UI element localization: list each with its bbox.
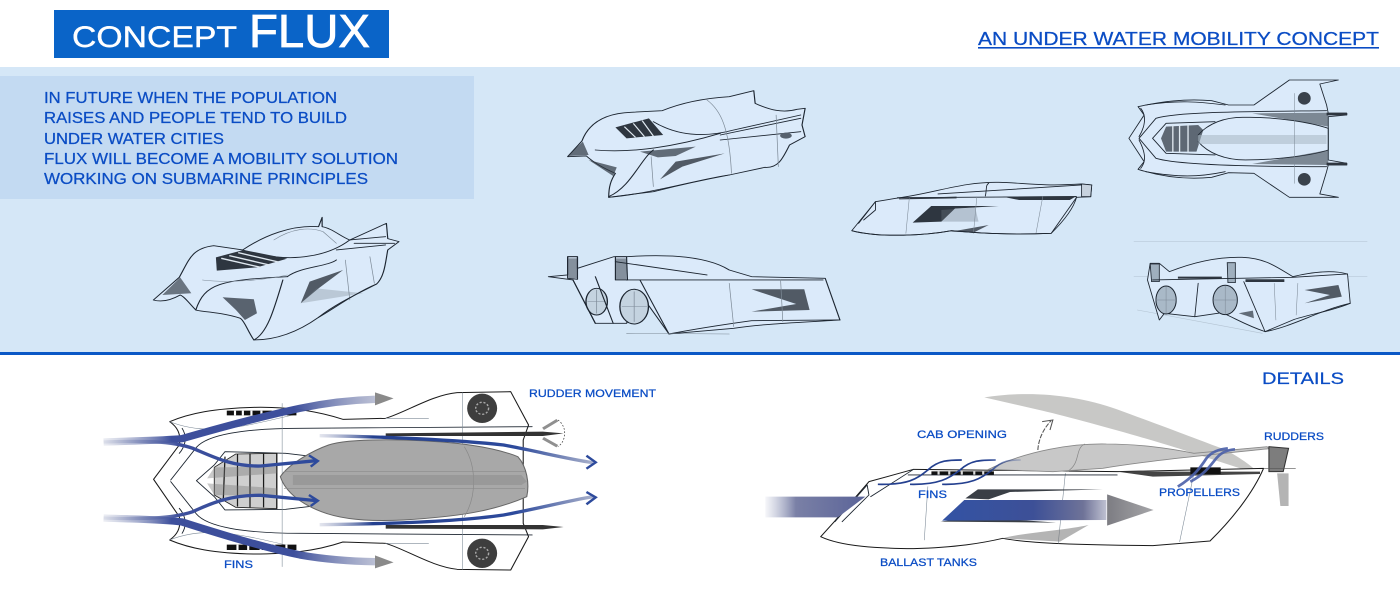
sketch: top view, upper right — [1129, 80, 1347, 197]
body detail lines — [924, 473, 1194, 543]
panel: intro text: UNDER WATER CITIES — [44, 131, 224, 148]
rudder — [1269, 447, 1289, 472]
cab opening arrow — [1038, 421, 1051, 450]
closed canopy — [989, 444, 1269, 472]
sketch: side view, centre right — [852, 182, 1092, 235]
diagram: side view with labels — [765, 394, 1296, 549]
label: cab opening: CAB OPENING — [917, 429, 1007, 441]
propellers — [467, 394, 497, 423]
flow bands — [765, 497, 865, 517]
panel: intro text: WORKING ON SUBMARINE PRINCIPLES — [44, 171, 368, 188]
fins — [227, 411, 296, 550]
label: ballast tanks: BALLAST TANKS — [880, 557, 977, 569]
sketch: rear view with propellers, lower middle — [548, 256, 840, 334]
panel: intro text: IN FUTURE WHEN THE POPULATION — [44, 90, 337, 107]
flow arrowheads — [375, 392, 394, 568]
label: fins top view: FINS — [224, 559, 253, 571]
panel: intro text — [0, 76, 474, 199]
vehicle body — [821, 468, 1264, 549]
vehicle outline — [154, 392, 529, 570]
propeller block — [1190, 467, 1221, 474]
title banner — [54, 5, 389, 58]
label: fins side view: FINS — [918, 489, 947, 501]
fins strip — [931, 471, 994, 475]
sketch: three-quarter view, upper middle — [568, 91, 805, 197]
diagram: top view with flow arrows — [104, 392, 596, 570]
title banner: CONCEPT — [72, 21, 237, 54]
canopy — [280, 440, 528, 521]
sketch: rear underside view, lower right — [1134, 242, 1367, 333]
subtitle: AN UNDER WATER MOBILITY CONCEPT — [978, 29, 1379, 49]
flow lines — [104, 399, 375, 442]
side intake shading — [940, 489, 1103, 523]
label: rudders: RUDDERS — [1264, 431, 1324, 443]
label: details heading: DETAILS — [1262, 369, 1344, 388]
label: propellers: PROPELLERS — [1159, 487, 1240, 499]
raised cab canopy — [984, 394, 1261, 475]
panel: sketch background — [0, 67, 1400, 352]
title banner: FLUX — [249, 5, 370, 57]
inner body lines — [171, 427, 532, 535]
divider band — [0, 352, 1400, 355]
panel: intro text: RAISES AND PEOPLE TEND TO BUILD — [44, 110, 347, 127]
label: rudder movement: RUDDER MOVEMENT — [529, 388, 656, 400]
rudders — [386, 432, 564, 529]
fin wave lines — [878, 460, 1021, 484]
engine intake — [214, 453, 277, 509]
sketch: three-quarter front view, lower left — [153, 217, 399, 340]
panel: intro text: FLUX WILL BECOME A MOBILITY SOLUTION — [44, 151, 398, 168]
